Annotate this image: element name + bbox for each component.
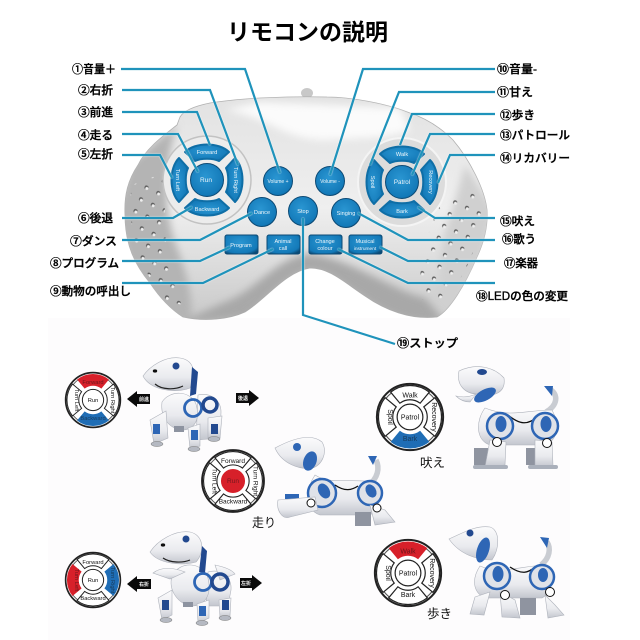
button: Singing: Singing bbox=[337, 211, 355, 217]
button: Bark bbox=[380, 201, 424, 218]
label 4: ④走る bbox=[78, 129, 113, 142]
speaker holes right bbox=[420, 190, 481, 300]
dial: bark bbox=[377, 384, 443, 450]
button: Run bbox=[190, 164, 224, 196]
label 1: ①音量＋ bbox=[72, 62, 116, 76]
button: Change colour: Change bbox=[315, 239, 335, 245]
right grip shading bbox=[440, 168, 488, 315]
dial: left and right: Forward bbox=[82, 560, 104, 566]
right d-pad ring bbox=[358, 138, 446, 226]
label 2: ②右折 bbox=[78, 83, 114, 97]
dial: walk: Spoil bbox=[384, 565, 391, 581]
button: Run: Run bbox=[200, 177, 212, 184]
button: Dance: Dance bbox=[254, 210, 270, 216]
label 17: ⑰楽器 bbox=[504, 256, 538, 270]
arrow: turn right bbox=[127, 576, 151, 592]
dial: run: Turn Left bbox=[210, 468, 217, 494]
leader line 12 bbox=[400, 114, 495, 145]
arrow: forward: 前進 bbox=[139, 396, 149, 403]
leader line 10 bbox=[330, 69, 495, 175]
button: Volume + bbox=[264, 166, 292, 196]
button: Forward: Forward bbox=[197, 150, 217, 156]
controller body bbox=[125, 97, 487, 319]
button: Musical instrument bbox=[349, 235, 382, 254]
label 16: ⑯歌う bbox=[502, 232, 536, 246]
button: Forward bbox=[185, 144, 229, 161]
dial: left and right: Backward bbox=[80, 596, 106, 602]
label 15: ⑮吠え bbox=[500, 215, 535, 228]
knob bbox=[301, 88, 313, 98]
robot dog: bark bbox=[456, 367, 558, 469]
button: Animal call: Animal bbox=[274, 239, 292, 245]
button: Bark: Bark bbox=[396, 209, 408, 215]
robot dog: run bbox=[275, 437, 395, 526]
dial: left and right: Turn Left bbox=[73, 569, 79, 592]
dial: bark: Recovery bbox=[430, 402, 437, 432]
button: Walk: Walk bbox=[396, 152, 408, 158]
leader line 2 bbox=[122, 90, 238, 165]
dial: bark: Spoil bbox=[386, 409, 393, 425]
label 13: ⑬パトロール bbox=[500, 129, 570, 142]
button: Change colour: colour bbox=[317, 246, 333, 252]
title: リモコンの説明 bbox=[227, 19, 388, 45]
button: Walk bbox=[380, 146, 424, 163]
arrow: backward bbox=[236, 390, 259, 406]
dial: forward and backward: Turn Left bbox=[73, 389, 79, 412]
robot dog: front view bottom bbox=[150, 532, 235, 626]
body shading bbox=[115, 102, 495, 325]
speaker holes left bbox=[130, 170, 182, 305]
leader line 7 bbox=[122, 213, 252, 240]
leader line 18 bbox=[338, 249, 495, 283]
label 9: ⑨動物の呼出し bbox=[50, 284, 131, 298]
button: Volume - bbox=[316, 166, 344, 196]
robot dog: walk bbox=[449, 527, 564, 618]
left d-pad ring bbox=[163, 136, 251, 224]
label 11: ⑪甘え bbox=[497, 85, 533, 99]
button: Patrol: Patrol bbox=[394, 179, 410, 186]
arrow: turn left bbox=[240, 575, 262, 591]
dial: forward and backward: Forward bbox=[82, 380, 104, 386]
button: Change colour bbox=[309, 235, 342, 254]
label 7: ⑦ダンス bbox=[70, 234, 117, 248]
button: Singing bbox=[332, 198, 360, 228]
dial: walk bbox=[375, 540, 441, 606]
leader line 14 bbox=[438, 155, 495, 183]
arrow: forward bbox=[127, 391, 150, 407]
leader line 8 bbox=[122, 247, 230, 261]
button: Animal call: call bbox=[279, 246, 287, 252]
leader line 15 bbox=[418, 207, 495, 218]
label 3: ③前進 bbox=[78, 105, 114, 119]
dial: left and right bbox=[66, 553, 120, 607]
page lower background bbox=[48, 318, 570, 640]
label 5: ⑤左折 bbox=[78, 147, 114, 161]
dial: run: Run bbox=[227, 478, 239, 485]
label 18: ⑱LEDの色の変更 bbox=[476, 289, 568, 303]
dial: walk: Recovery bbox=[428, 558, 435, 588]
label 14: ⑭リカバリー bbox=[500, 152, 570, 165]
leader line 1 bbox=[121, 69, 280, 173]
button: Musical instrument: Musical bbox=[356, 239, 374, 245]
button: Recovery bbox=[421, 160, 438, 204]
dial: run: Turn Right bbox=[252, 466, 259, 496]
button: Patrol bbox=[386, 166, 418, 198]
dial: forward and backward: Run bbox=[88, 398, 98, 404]
button: Turn Left bbox=[172, 158, 188, 202]
dial: forward and backward: Backward bbox=[80, 416, 106, 422]
label 10: ⑩音量- bbox=[497, 62, 537, 76]
button: Volume +: Volume + bbox=[268, 179, 289, 185]
left grip shading bbox=[125, 126, 193, 318]
dial: left and right: Turn Right bbox=[109, 567, 115, 594]
leader line 6 bbox=[122, 207, 192, 218]
leader line 13 bbox=[412, 134, 495, 175]
top highlight bbox=[225, 102, 410, 140]
leader line 4 bbox=[122, 134, 198, 172]
dial: bark: Patrol bbox=[401, 414, 420, 421]
caption: walk: 歩き bbox=[427, 606, 452, 621]
button: Backward bbox=[185, 199, 229, 216]
button: Spoil: Spoil bbox=[369, 176, 375, 188]
dial: left and right: Run bbox=[88, 578, 98, 584]
dial: forward and backward bbox=[66, 373, 120, 427]
arrow: turn right: 右折 bbox=[139, 581, 149, 588]
controller bbox=[115, 88, 495, 325]
dial: run: Forward bbox=[221, 458, 245, 465]
button: Spoil bbox=[366, 160, 383, 204]
button: Turn Right: Turn Right bbox=[232, 167, 238, 193]
leader line 5 bbox=[122, 155, 172, 178]
button: Dance bbox=[248, 198, 276, 226]
leader line 9 bbox=[122, 249, 273, 283]
caption: bark: 吠え bbox=[420, 456, 445, 470]
dial: bark: Bark bbox=[403, 436, 418, 443]
button: Turn Left: Turn Left bbox=[174, 169, 180, 192]
button: Stop bbox=[288, 196, 318, 226]
caption: run: 走り bbox=[252, 516, 276, 530]
dial: run: Backward bbox=[219, 498, 248, 505]
dial: walk: Bark bbox=[401, 592, 416, 599]
label 19: ⑲ストップ bbox=[397, 337, 459, 350]
leader line 16 bbox=[358, 213, 495, 240]
dial: walk: Patrol bbox=[399, 570, 418, 577]
button: Stop: Stop bbox=[297, 209, 309, 215]
dial: walk: Walk bbox=[400, 549, 416, 556]
button: Musical instrument: instrument bbox=[354, 246, 377, 252]
label 12: ⑫歩き bbox=[500, 108, 535, 122]
button: Turn Right bbox=[226, 158, 242, 202]
label 8: ⑧プログラム bbox=[50, 256, 119, 270]
button: Backward: Backward bbox=[195, 207, 219, 213]
leader line 19 bbox=[303, 218, 395, 344]
leader line 11 bbox=[370, 92, 495, 165]
label 6: ⑥後退 bbox=[78, 211, 114, 225]
arrow: turn left: 左折 bbox=[241, 580, 251, 587]
arrow: backward: 後退 bbox=[238, 395, 248, 402]
dial: forward and backward: Turn Right bbox=[109, 387, 115, 414]
robot dog: front view top bbox=[143, 358, 222, 452]
button: Volume -: Volume - bbox=[320, 179, 340, 185]
dial: run bbox=[202, 450, 264, 512]
leader line 3 bbox=[122, 112, 210, 145]
button: Animal call bbox=[267, 235, 300, 254]
button: Program: Program bbox=[230, 243, 252, 249]
button: Program bbox=[225, 235, 258, 254]
leader line 17 bbox=[380, 247, 495, 261]
dial: bark: Walk bbox=[402, 393, 418, 400]
button: Recovery: Recovery bbox=[427, 170, 433, 194]
bottom shading bbox=[175, 254, 445, 325]
